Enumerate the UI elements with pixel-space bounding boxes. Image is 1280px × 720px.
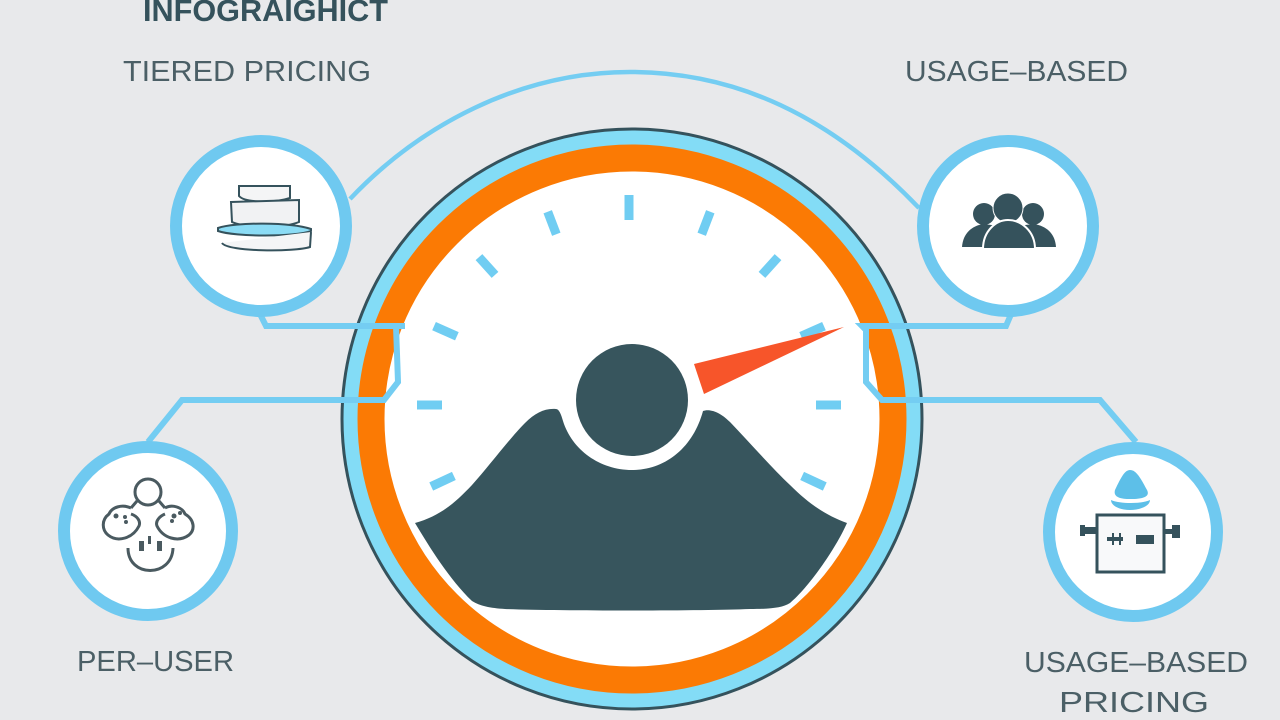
label: usage-based pricing [1024,647,1248,719]
badge: tiered pricing [176,141,346,311]
label: usage-based pricing: PRICING [1059,687,1209,719]
icon: meter box with drop [1080,470,1180,572]
label: per-user: PER–USER [77,646,234,678]
mountain silhouette [415,409,847,610]
icon: three users [962,193,1056,249]
badge: per-user [64,447,232,615]
icon: user cluster [103,479,193,570]
label: usage-based top: USAGE–BASED [905,56,1128,88]
gauge tick marks [417,195,841,491]
icon: stacked tiers [218,186,311,250]
badge: people group [923,141,1093,311]
right connectors [862,312,1136,442]
gauge dial [342,129,922,709]
badge: usage-based pricing [1049,448,1217,616]
label: tiered pricing: TIERED PRICING [123,56,371,88]
left connectors [148,310,405,442]
gauge needle [694,327,844,394]
label: usage-based pricing: USAGE–BASED [1024,647,1248,679]
arc connector between top badges [350,72,919,208]
gauge hub [576,344,688,456]
